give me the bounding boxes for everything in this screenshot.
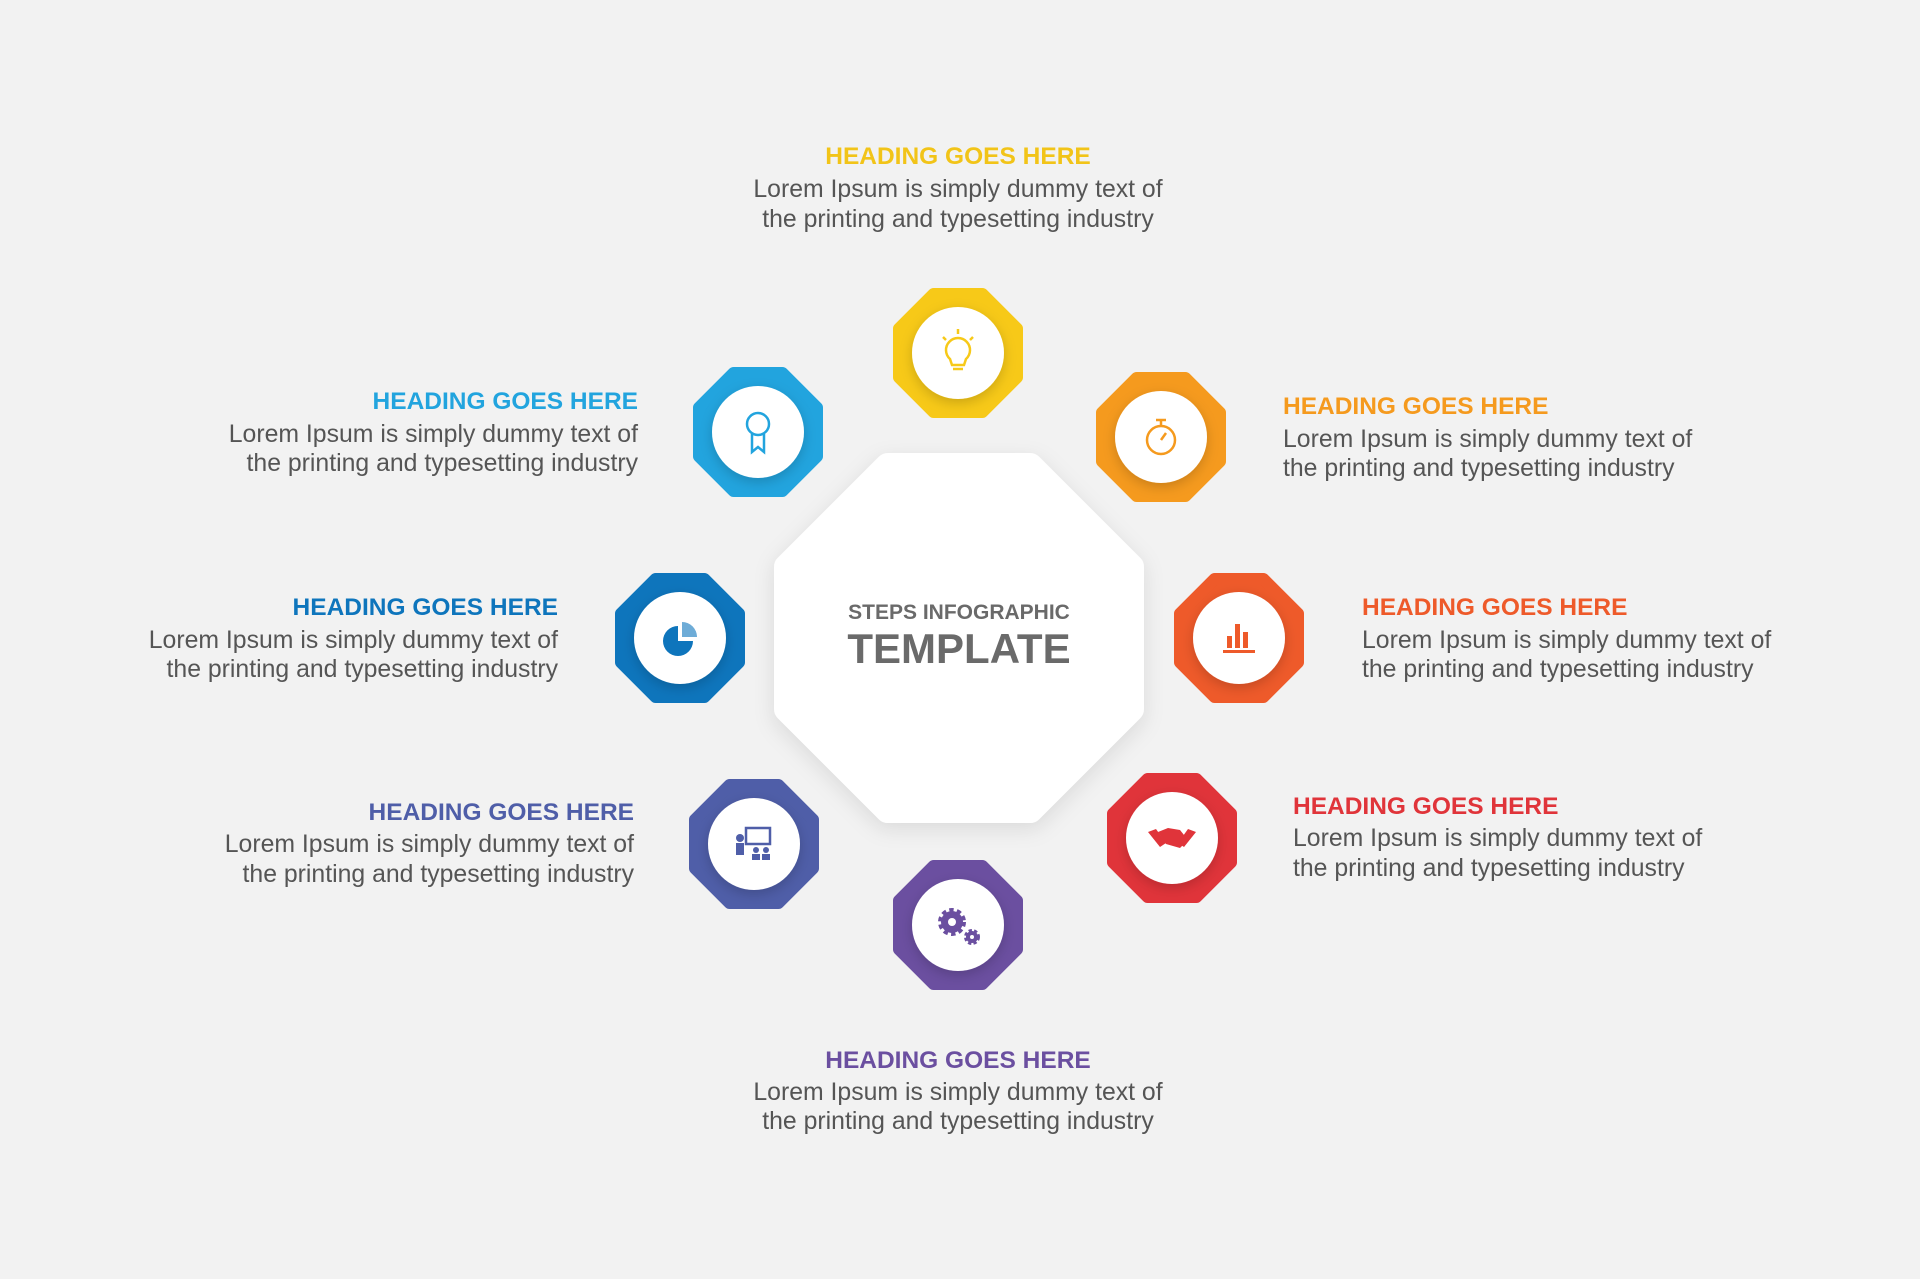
text: red: the printing and typesetting industry: [1293, 855, 1685, 882]
icon: award ribbon: [747, 413, 769, 452]
node: indigo presentation: [695, 785, 813, 903]
text: light blue: Lorem Ipsum is simply dummy text of: [229, 421, 638, 448]
icon: bar chart: [1223, 624, 1255, 653]
node: orange stopwatch: [1102, 378, 1220, 496]
node: light blue award: [699, 373, 817, 491]
text: red-orange: the printing and typesetting industry: [1362, 656, 1754, 683]
text: orange: [1283, 393, 1692, 482]
text: red-orange: Lorem Ipsum is simply dummy text of: [1362, 627, 1771, 654]
node: red handshake: [1113, 779, 1231, 897]
text: top yellow: the printing and typesetting industry: [762, 206, 1154, 233]
icon: lightbulb: [943, 329, 973, 369]
text: blue: HEADING GOES HERE: [293, 594, 558, 621]
text: top yellow: Lorem Ipsum is simply dummy text of: [753, 176, 1163, 203]
text: bottom purple: Lorem Ipsum is simply dummy text of: [753, 1079, 1163, 1106]
text: light blue: [229, 388, 639, 477]
node: red-orange chart: [1180, 579, 1298, 697]
text: indigo: Lorem Ipsum is simply dummy text of: [225, 831, 634, 858]
node: purple gears: [899, 866, 1017, 984]
icon: pie chart: [663, 622, 697, 656]
icon: presentation: [736, 828, 770, 860]
text: orange: HEADING GOES HERE: [1283, 393, 1548, 420]
icon: gears: [941, 911, 978, 943]
text: orange: Lorem Ipsum is simply dummy text of: [1283, 426, 1692, 453]
text: top yellow: HEADING GOES HERE: [825, 143, 1091, 170]
text: indigo: the printing and typesetting industry: [243, 861, 635, 888]
text: red-orange: [1362, 594, 1771, 683]
text: light blue: the printing and typesetting industry: [247, 450, 639, 477]
text: bottom purple: [753, 1047, 1163, 1135]
text: red: HEADING GOES HERE: [1293, 793, 1558, 820]
text: red-orange: HEADING GOES HERE: [1362, 594, 1627, 621]
text: bottom purple: HEADING GOES HERE: [825, 1047, 1091, 1074]
center title: STEPS INFOGRAPHIC: [848, 601, 1070, 624]
text: bottom purple: the printing and typesetting industry: [762, 1108, 1154, 1135]
center title: [847, 601, 1071, 672]
text: indigo: HEADING GOES HERE: [369, 799, 634, 826]
node: yellow idea: [899, 294, 1017, 412]
text: blue: [149, 594, 559, 683]
icon: handshake: [1148, 828, 1196, 848]
text: light blue: HEADING GOES HERE: [373, 388, 638, 415]
text: indigo: [225, 799, 635, 888]
text: blue: the printing and typesetting industry: [167, 656, 559, 683]
node: blue pie: [621, 579, 739, 697]
text: top yellow: [753, 143, 1163, 233]
text: red: Lorem Ipsum is simply dummy text of: [1293, 825, 1702, 852]
text: orange: the printing and typesetting industry: [1283, 455, 1675, 482]
center title: TEMPLATE: [847, 625, 1071, 672]
text: red: [1293, 793, 1702, 882]
text: blue: Lorem Ipsum is simply dummy text of: [149, 627, 558, 654]
center octagon: [787, 466, 1131, 810]
icon: stopwatch: [1147, 420, 1175, 454]
